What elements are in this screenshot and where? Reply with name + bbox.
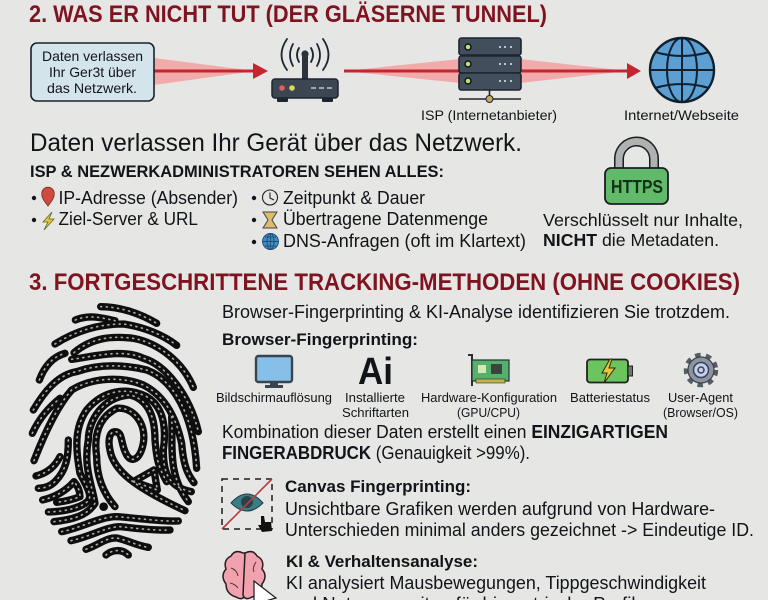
item: installed fonts: Installierte bbox=[345, 390, 405, 405]
item: installed fonts: Ai bbox=[358, 351, 393, 393]
heading: section 2: 2. WAS ER NICHT TUT (DER GLÄSERNE TUNNEL) bbox=[29, 1, 547, 28]
arrow: router through ISP to internet bbox=[344, 59, 641, 83]
text: canvas fingerprinting: Unsichtbare Grafiken werden aufgrund von Hardware- bbox=[285, 499, 715, 519]
item: battery status bbox=[570, 359, 650, 405]
subheading: browser fingerprinting: Browser-Fingerprinting: bbox=[222, 330, 418, 349]
callout: data leaves device: das Netzwerk. bbox=[47, 80, 137, 96]
item: user agent bbox=[663, 355, 738, 420]
list: left metadata column bbox=[32, 187, 238, 230]
item: installed fonts: Schriftarten bbox=[342, 405, 409, 420]
item: battery status: Batteriestatus bbox=[570, 390, 650, 405]
item: screen resolution: Bildschirmauflösung bbox=[216, 390, 332, 405]
icon: clock bbox=[262, 190, 278, 205]
text: section 3 intro: Browser-Fingerprinting & KI-Analyse identifizieren Sie trotzdem. bbox=[222, 302, 730, 322]
text: canvas fingerprinting: Canvas Fingerprinting: bbox=[285, 477, 471, 496]
list: left metadata column: Ziel-Server & URL bbox=[58, 209, 198, 229]
text: AI behavior analysis: KI & Verhaltensanalyse: bbox=[286, 552, 478, 571]
icon: ISP server bbox=[459, 38, 521, 102]
icon: small globe bbox=[262, 234, 278, 250]
icon: graphics card bbox=[468, 355, 509, 386]
callout: data leaves device: Daten verlassen bbox=[42, 48, 143, 64]
icon: gear bbox=[686, 355, 716, 385]
text: AI behavior analysis bbox=[286, 552, 706, 600]
icon: battery bbox=[587, 359, 632, 383]
list: right metadata column: Übertragene Datenmenge bbox=[283, 209, 488, 229]
icon: monitor bbox=[256, 356, 292, 388]
item: user agent: (Browser/OS) bbox=[663, 405, 738, 420]
icon: router bbox=[272, 39, 338, 102]
item: user agent: User-Agent bbox=[668, 390, 733, 405]
text: canvas fingerprinting: Unterschieden minimal anders gezeichnet -> Eindeutige ID. bbox=[285, 520, 754, 540]
label: internet: Internet/Webseite bbox=[624, 107, 739, 123]
text: combination result: Kombination dieser Daten erstellt einen EINZIGARTIGEN bbox=[222, 422, 668, 442]
text: canvas fingerprinting bbox=[285, 477, 754, 540]
arrow: device to router bbox=[154, 58, 268, 85]
illustration: fingerprint bbox=[32, 307, 198, 555]
list: right metadata column: DNS-Anfragen (oft im Klartext) bbox=[283, 231, 526, 251]
item: hardware configuration bbox=[421, 355, 557, 420]
icon: hourglass bbox=[263, 212, 277, 228]
text: combination result: FINGERABDRUCK (Genauigkeit >99%). bbox=[222, 443, 530, 463]
icon: HTTPS lock bbox=[605, 142, 668, 204]
subheading: who sees everything: ISP & NEZWERKADMINISTRATOREN SEHEN ALLES: bbox=[30, 162, 444, 181]
label: ISP: ISP (Internetanbieter) bbox=[421, 107, 557, 123]
text: HTTPS note: NICHT die Metadaten. bbox=[543, 230, 719, 250]
list: right metadata column bbox=[252, 188, 526, 251]
list: right metadata column: Zeitpunkt & Dauer bbox=[283, 188, 425, 208]
callout: data leaves device: Ihr Ger3t über bbox=[49, 64, 136, 80]
text: AI behavior analysis: KI analysiert Mausbewegungen, Tippgeschwindigkeit bbox=[286, 573, 706, 593]
callout: data leaves device bbox=[31, 43, 154, 101]
text: intro line: Daten verlassen Ihr Gerät über das Netzwerk. bbox=[30, 129, 522, 157]
item: hardware configuration: Hardware-Konfiguration bbox=[421, 390, 557, 405]
icon: canvas crossed eye bbox=[222, 479, 272, 532]
list: left metadata column: IP-Adresse (Absender) bbox=[58, 188, 238, 208]
item: screen resolution bbox=[216, 356, 332, 405]
icon: brain with cursor bbox=[223, 552, 276, 600]
icon: globe bbox=[650, 38, 714, 102]
item: hardware configuration: (GPU/CPU) bbox=[457, 405, 520, 420]
text: HTTPS note: Verschlüsselt nur Inhalte, bbox=[543, 210, 743, 230]
item: installed fonts bbox=[342, 351, 409, 420]
icon: HTTPS lock: HTTPS bbox=[611, 177, 663, 197]
text: HTTPS note bbox=[543, 210, 743, 250]
icon: location pin bbox=[42, 187, 54, 206]
icon: lightning bolt bbox=[43, 212, 54, 230]
text: combination result bbox=[222, 422, 668, 463]
